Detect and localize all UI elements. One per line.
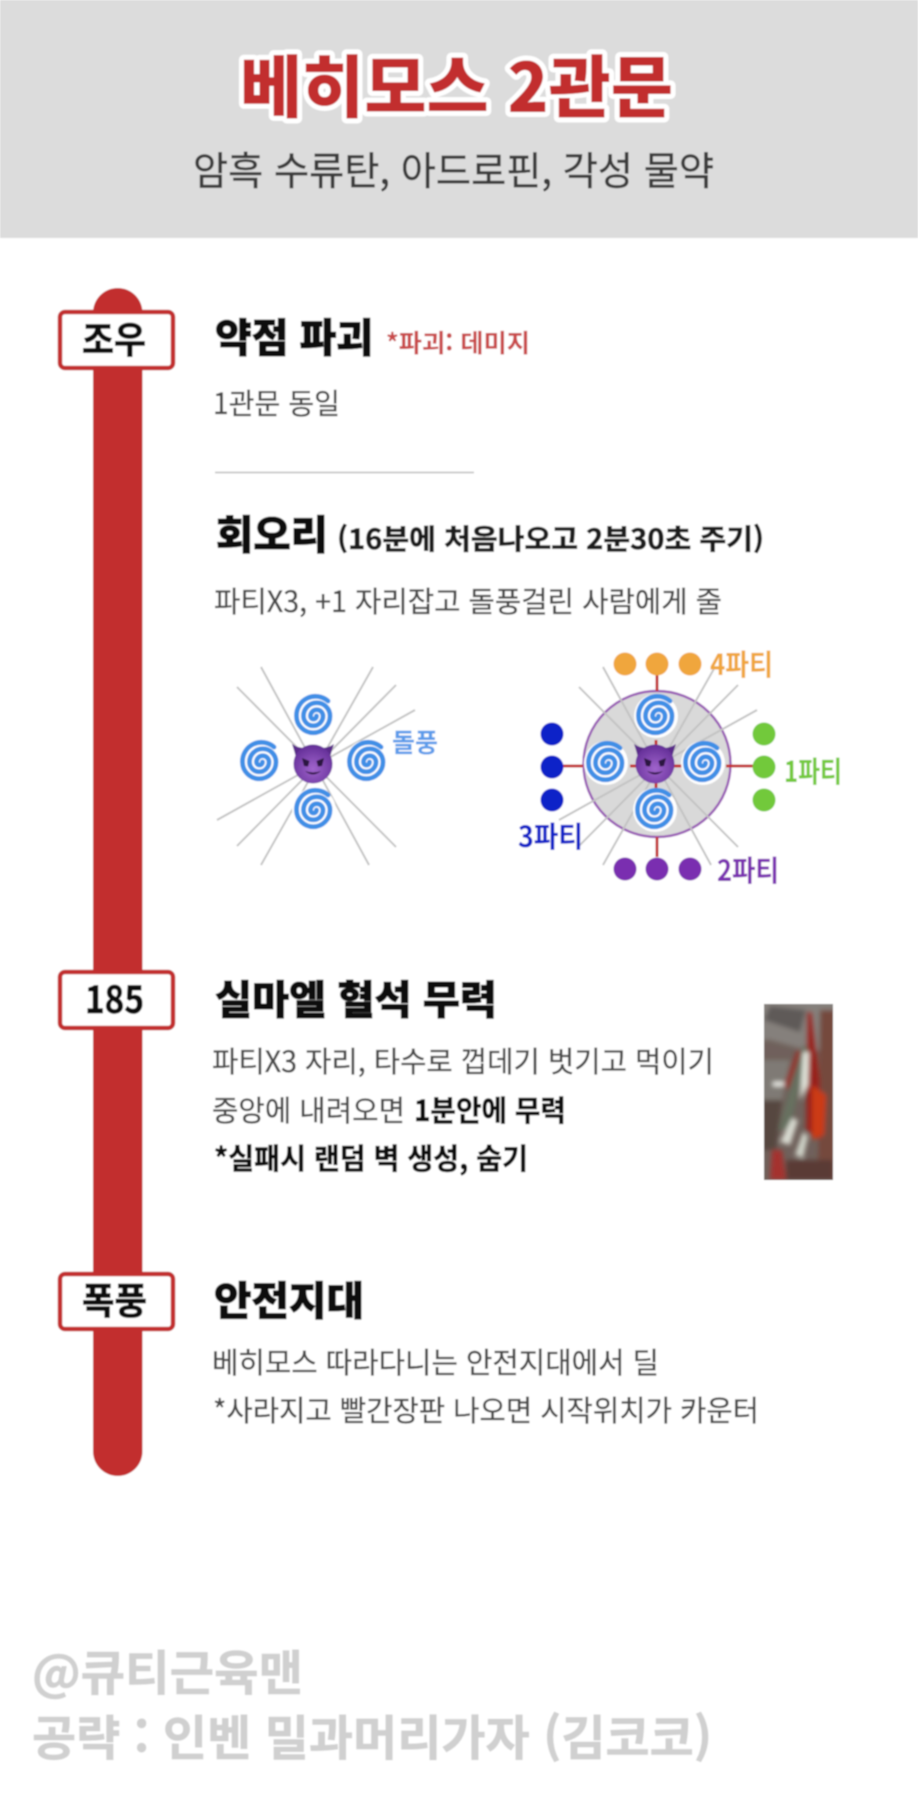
credit: guide source: 공략 : 인벤 밀과머리가자 (김코코) <box>32 1699 712 1769</box>
safe circle <box>584 691 730 837</box>
body text: 파티X3, +1 자리잡고 돌풍걸린 사람에게 줄 <box>214 579 722 621</box>
section: 약점 파괴 <box>213 306 530 423</box>
timeline bar <box>93 288 142 1476</box>
diagram: party positions <box>518 642 842 890</box>
timeline tag: 185: 185 <box>85 970 144 1024</box>
icon: whirlwind right <box>345 740 389 784</box>
note: 파괴 데미지: *파괴: 데미지 <box>386 324 530 360</box>
icon: whirlwind left <box>584 741 628 785</box>
icon: whirlwind right <box>681 741 725 785</box>
header panel <box>0 0 918 238</box>
title: 베히모스 2관문 <box>240 33 673 132</box>
section: 회오리 <box>214 503 764 621</box>
party 1 dots <box>752 722 776 812</box>
icon: devil boss <box>292 744 334 784</box>
connector lines <box>563 675 755 857</box>
credit: author: @큐티근육맨 <box>32 1634 303 1704</box>
body line 2: 중앙에 내려오면 <box>212 1088 405 1130</box>
icon: whirlwind bottom <box>633 788 677 832</box>
body line 1: 베히모스 따라다니는 안전지대에서 딜 <box>212 1340 659 1382</box>
subtitle: 암흑 수류탄, 아드로핀, 각성 물약 <box>193 141 714 197</box>
body line 2: *사라지고 빨간장판 나오면 시작위치가 카운터 <box>213 1388 759 1430</box>
heading: 안전지대 <box>214 1269 364 1327</box>
heading: 회오리: 회오리 <box>216 503 328 561</box>
body line 3 bold: *실패시 랜덤 벽 생성, 숨기 <box>214 1136 528 1178</box>
body text: 1관문 동일 <box>213 381 340 423</box>
diagram: boss with four whirlwinds <box>217 667 438 865</box>
section: 안전지대 <box>212 1269 759 1430</box>
label: 4파티: 4파티 <box>710 642 773 684</box>
heading: 실마엘 혈석 무력 <box>215 968 497 1026</box>
body line 2 bold: 1분안에 무력 <box>414 1088 566 1130</box>
icon: devil boss <box>634 744 676 784</box>
party 2 dots <box>614 858 702 880</box>
label: 3파티: 3파티 <box>518 814 583 856</box>
icon: whirlwind top <box>292 694 336 738</box>
timeline tag: 185 <box>60 970 173 1028</box>
section: 실마엘 혈석 무력 <box>212 968 714 1178</box>
footer credits <box>32 1634 712 1769</box>
label: 1파티: 1파티 <box>784 749 842 791</box>
timeline tag: 폭풍: 폭풍 <box>82 1271 147 1325</box>
party 3 dots <box>540 722 564 812</box>
label: 2파티: 2파티 <box>717 848 779 890</box>
header background <box>0 0 918 238</box>
icon: whirlwind left <box>238 740 282 784</box>
party 4 dots <box>614 652 702 676</box>
image: blood stone photo <box>763 1003 834 1181</box>
label: 돌풍: 돌풍 <box>392 723 438 760</box>
icon: whirlwind top <box>634 694 678 738</box>
icon: whirlwind bottom <box>292 788 336 832</box>
heading note: timing: (16분에 처음나오고 2분30초 주기) <box>337 518 764 558</box>
body line 1: 파티X3 자리, 타수로 껍데기 벗기고 먹이기 <box>212 1039 714 1081</box>
heading: 약점 파괴: 약점 파괴 <box>215 306 373 364</box>
timeline tag: 조우: 조우 <box>82 310 146 364</box>
timeline tag: 조우 <box>60 310 173 368</box>
timeline tag: 폭풍 <box>60 1271 173 1329</box>
